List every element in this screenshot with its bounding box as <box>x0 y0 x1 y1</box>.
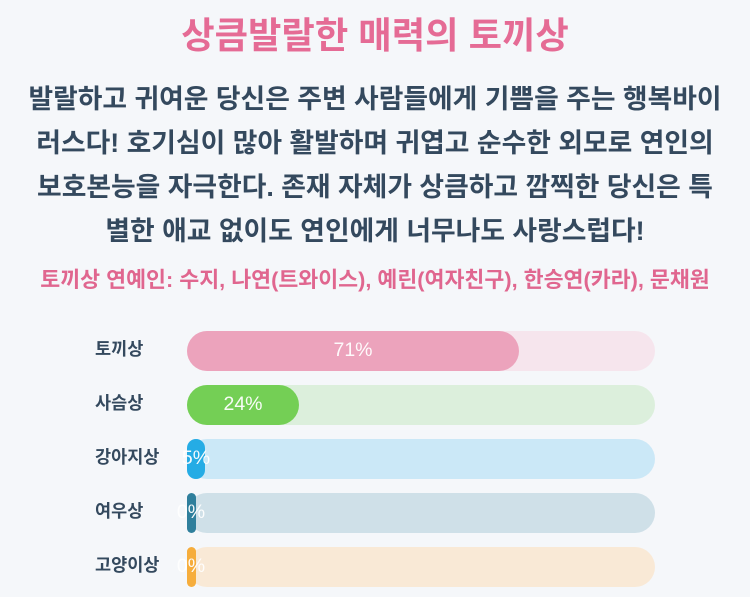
bar: 사슴상 24%: 24% <box>223 393 263 415</box>
bar: 토끼상 71%: 토끼상 <box>95 339 143 359</box>
bar: 여우상 0%: 0% <box>177 501 205 523</box>
bar: 토끼상 71% <box>95 331 655 371</box>
description text block: 러스다! 호기심이 많아 활발하며 귀엽고 순수한 외모로 연인의 <box>36 128 714 158</box>
bar: 여우상 0% <box>95 493 655 533</box>
bar: 고양이상 0%: 0% <box>177 555 205 577</box>
bar: 고양이상 0%: 고양이상 <box>95 555 159 575</box>
bar: 고양이상 0% <box>95 547 655 587</box>
description text block: 발랄하고 귀여운 당신은 주변 사람들에게 기쁨을 주는 행복바이 <box>28 84 722 114</box>
bar: 강아지상 5%: 강아지상 <box>95 447 159 467</box>
bar: 강아지상 5% <box>95 439 655 479</box>
bar: 사슴상 24% <box>95 385 655 425</box>
description text block <box>28 84 722 246</box>
title: 상큼발랄한 매력의 토끼상 <box>181 15 569 56</box>
celebrity list: 토끼상 연예인: 수지, 나연(트와이스), 예린(여자친구), 한승연(카라), 문채원 <box>40 267 710 292</box>
bar chart <box>95 331 655 587</box>
bar: 강아지상 5%: 5% <box>182 447 210 469</box>
bar: 사슴상 24%: 사슴상 <box>95 393 143 413</box>
description text block: 보호본능을 자극한다. 존재 자체가 상큼하고 깜찍한 당신은 특 <box>37 172 713 202</box>
bar: 여우상 0%: 여우상 <box>95 501 143 521</box>
bar: 토끼상 71%: 71% <box>333 339 373 361</box>
description text block: 별한 애교 없이도 연인에게 너무나도 사랑스럽다! <box>105 216 645 246</box>
